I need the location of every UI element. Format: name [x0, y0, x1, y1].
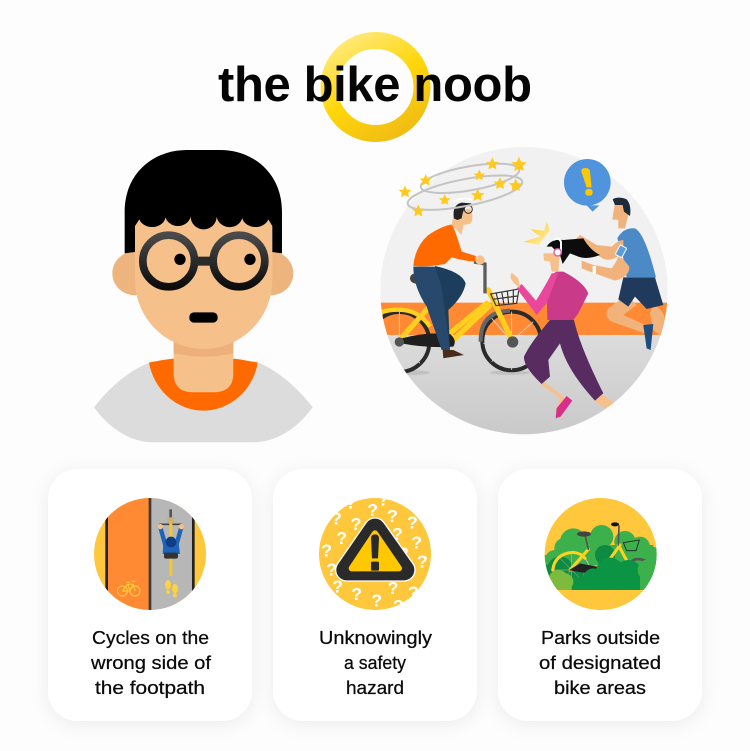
bike lane symbol: [117, 581, 140, 596]
scene background: [380, 147, 668, 302]
card background: [48, 469, 252, 721]
character portrait: the noob: [94, 150, 313, 442]
caption: [90, 627, 212, 698]
caption: a safety: [344, 652, 407, 673]
caption: wrong side of: [90, 652, 212, 673]
icon: warning sign on question marks: ?: [393, 596, 404, 616]
icon: warning sign on question marks: ?: [408, 582, 419, 602]
caption: Unknowingly: [319, 627, 433, 648]
impact crown: [523, 222, 550, 245]
basket: [491, 289, 519, 306]
face: [135, 217, 272, 349]
caption: of designated: [539, 652, 661, 673]
dizzy rings: [405, 158, 525, 217]
caption: [319, 627, 433, 698]
caption: Cycles on the: [92, 627, 209, 648]
mouth: [189, 312, 218, 323]
icon: warning sign on question marks: ?: [336, 528, 347, 548]
caption: bike areas: [554, 677, 646, 698]
ground shadows: [406, 370, 530, 375]
icon: warning sign on question marks: ?: [398, 543, 409, 563]
eyes: [174, 254, 186, 265]
icon: warning sign on question marks: ?: [350, 514, 361, 534]
glasses: [143, 235, 265, 287]
icon: warning sign on question marks: ?: [371, 591, 382, 611]
icon: warning sign on question marks: ?: [326, 559, 337, 579]
title text: the bike noob: [218, 58, 532, 112]
icon: warning sign on question marks: ?: [392, 524, 403, 544]
ears: [112, 251, 293, 295]
caption: the footpath: [95, 677, 205, 698]
dizzy stars: [399, 157, 527, 216]
alert speech bubble: [564, 159, 611, 212]
card background: [498, 469, 702, 721]
cyclist man: [413, 198, 485, 358]
icon: warning sign on question marks: ?: [387, 578, 398, 598]
card 2: safety hazard: [273, 469, 477, 721]
icon: warning sign on question marks: ?: [378, 489, 389, 509]
shirt: [94, 362, 313, 442]
icon: warning sign on question marks: ?: [332, 577, 343, 597]
card background: [273, 469, 477, 721]
card 1: wrong side of the footpath: [48, 469, 252, 721]
parked bike: [553, 526, 645, 588]
caption: Parks outside: [541, 627, 660, 648]
icon: warning sign on question marks: ?: [351, 584, 362, 604]
caption: [539, 627, 661, 698]
neck: [174, 337, 233, 392]
orange path band: [370, 303, 680, 335]
icon: warning sign on question marks: [319, 498, 431, 610]
icon: warning sign on question marks: ?: [345, 493, 356, 513]
icon: warning sign on question marks: ?: [367, 500, 378, 520]
icon: warning sign on question marks: ?: [411, 533, 422, 553]
icon: cyclist on footpath: [94, 498, 206, 610]
icon: warning sign on question marks: ?: [407, 513, 418, 533]
front bushes: [572, 558, 643, 590]
cyclist from above: [158, 509, 184, 576]
icon: bike parked in bushes: [543, 498, 662, 613]
icon: warning sign on question marks: ?: [387, 506, 398, 526]
jogger woman: [511, 222, 615, 418]
card 3: bad parking: [498, 469, 702, 721]
icon: warning sign on question marks: ?: [331, 509, 342, 529]
yellow ring: [329, 40, 422, 134]
caption: hazard: [346, 677, 404, 698]
hair: [125, 150, 282, 253]
icon: warning sign on question marks: ?: [321, 541, 332, 561]
scene: dazed cyclist collides with joggers: [380, 147, 668, 434]
title with yellow ring: [218, 40, 532, 134]
bicycle: [369, 262, 541, 372]
back bushes: [543, 525, 662, 590]
footprints symbol: [165, 580, 178, 597]
icon: warning sign on question marks: ?: [417, 551, 428, 571]
orange collar: [149, 357, 258, 411]
jogger man: [575, 198, 666, 350]
